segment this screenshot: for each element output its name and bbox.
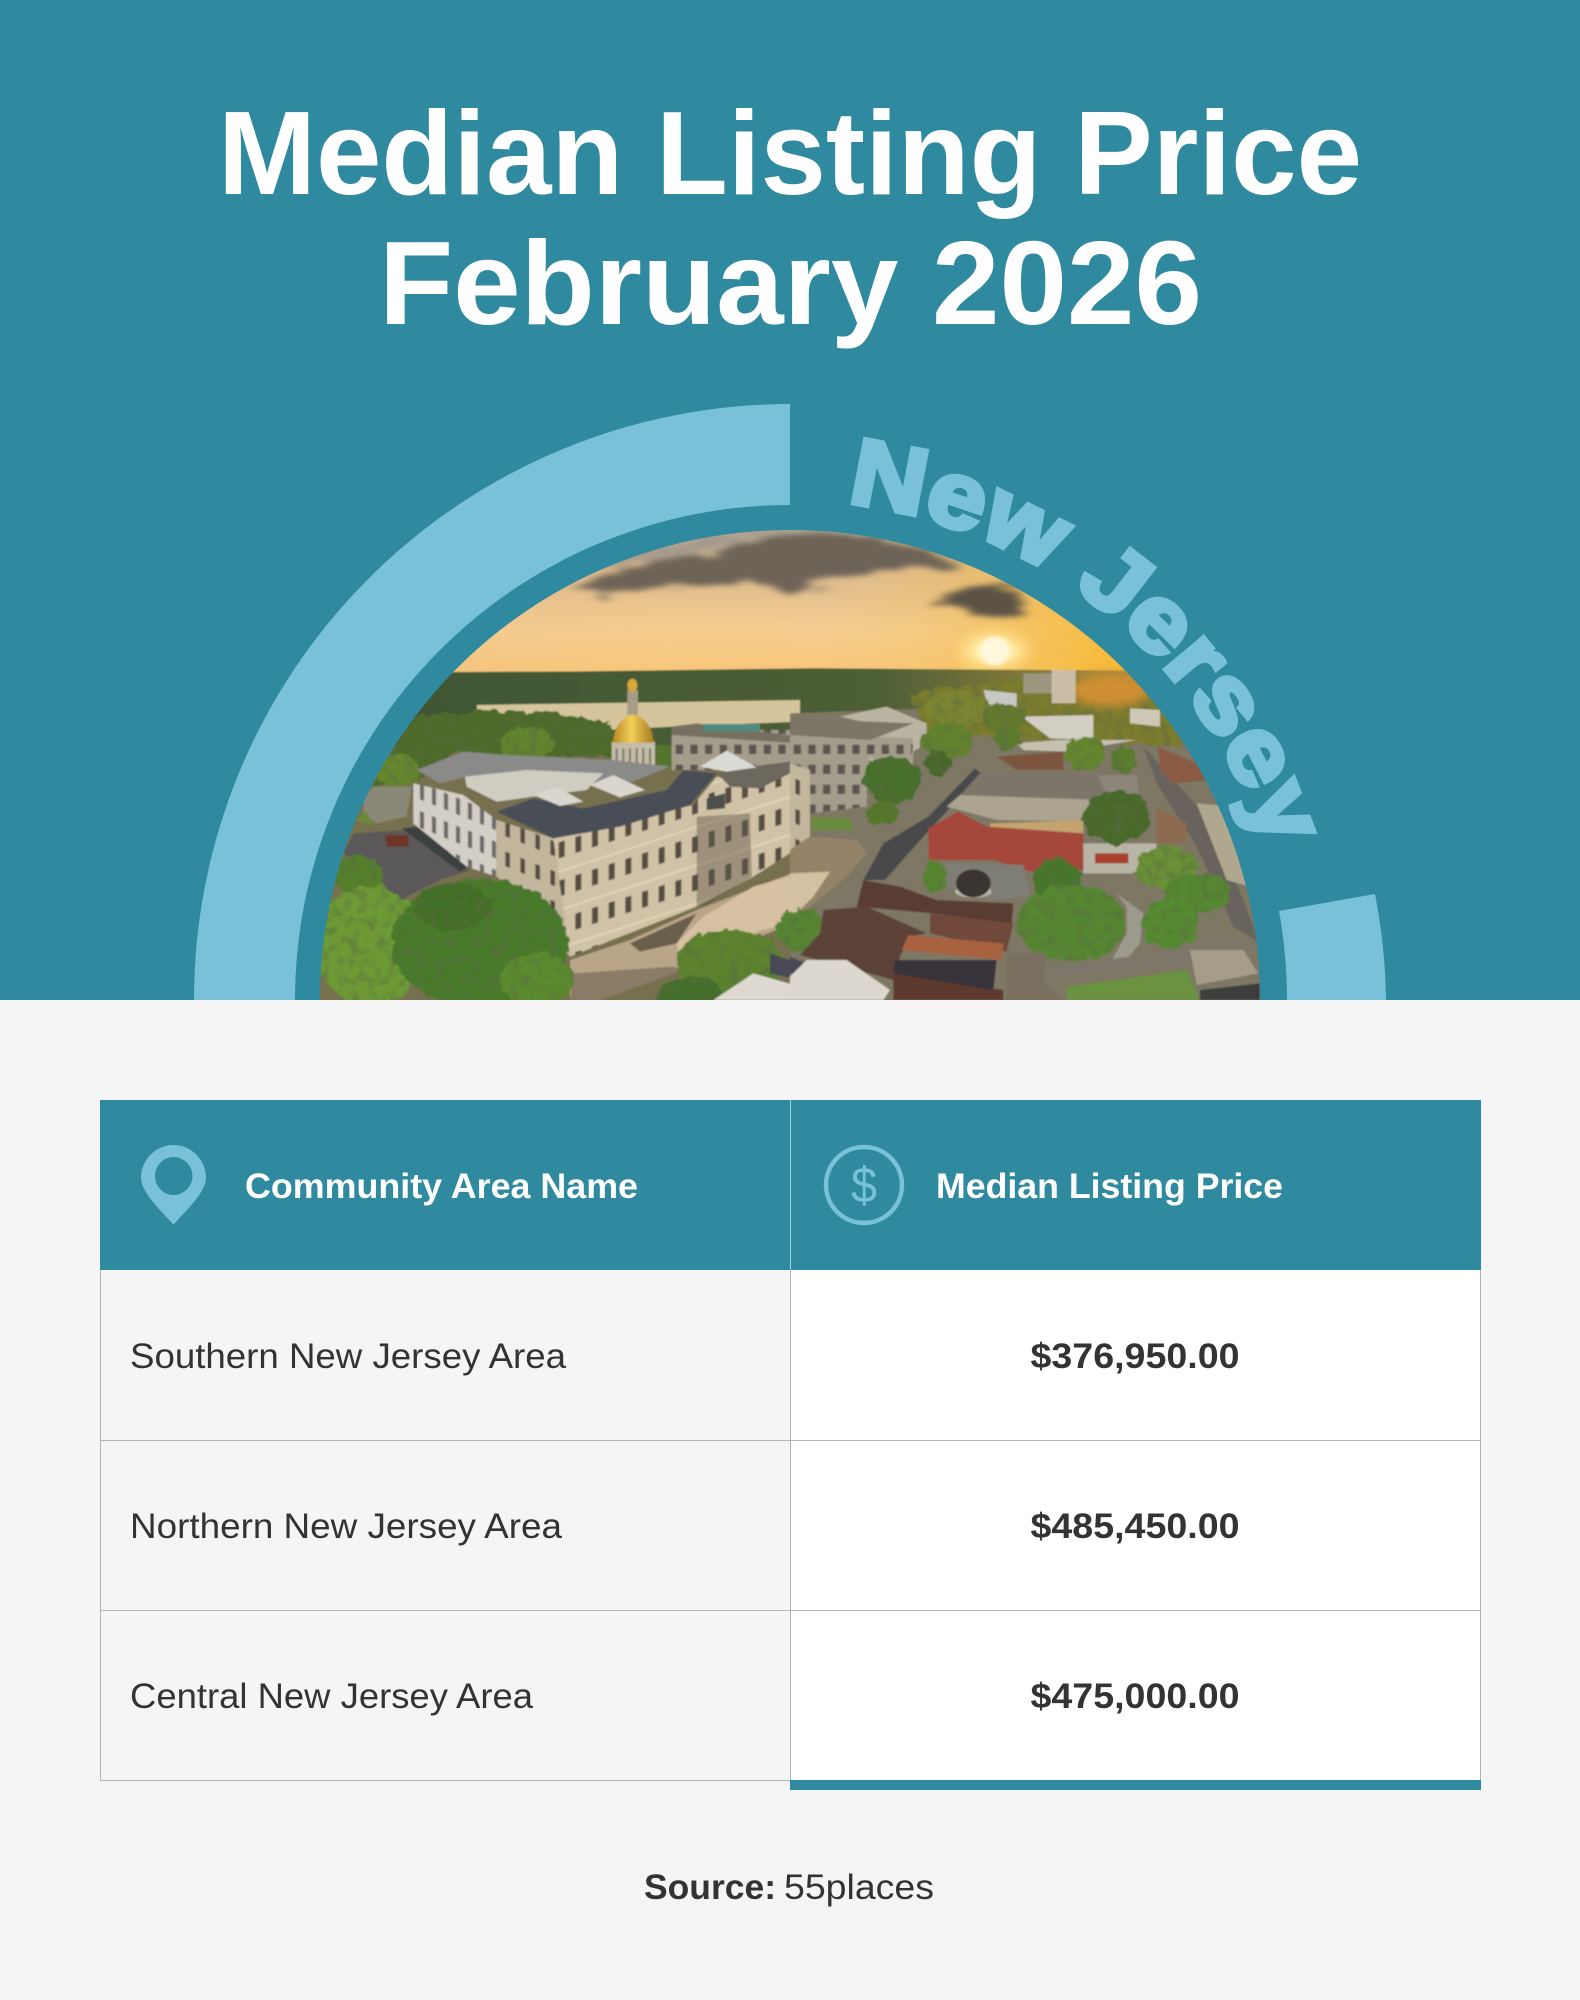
plaza [570,870,800,1000]
grounds and dirt [812,817,853,830]
panel: teal header [0,0,1580,1000]
street right and brick [1143,747,1260,943]
table value column background [790,1270,1480,1780]
red brick building [990,820,1083,833]
right half: town buildings and trees [777,670,1270,1000]
sky and far horizon [394,530,1133,746]
gold dome [612,679,655,770]
river [476,698,802,731]
capitol roofs and wings [417,752,670,787]
table accent bar [790,1780,1481,1790]
icon: dollar coin [826,1147,902,1223]
icon: location pin [141,1145,206,1224]
title: Median Listing Price [218,87,1362,220]
row: southern new jersey: Southern New Jersey Area [130,1337,567,1376]
trees [777,692,1230,962]
memorial [945,863,1030,900]
rooftops [857,880,1013,925]
row: central new jersey: Central New Jersey Area [130,1677,534,1716]
curved label: New Jersey: New Jersey [850,436,1318,834]
row: southern new jersey [130,1337,1240,1376]
town buildings [1022,715,1093,740]
right arc ring segment [1279,894,1386,1000]
road [863,768,982,880]
riverside trees [370,710,613,787]
icon: dollar coin: $ [851,1157,877,1213]
base ground [790,700,1270,1000]
source note: 55places [784,1868,934,1907]
row: southern new jersey: $376,950.00 [1030,1337,1240,1376]
table header row [100,1100,1481,1270]
bottom roofs [769,953,790,978]
row: northern new jersey: Northern New Jersey Area [130,1507,563,1546]
annex [1083,843,1157,873]
left half: capitol, dome, trees [317,679,800,1017]
row: northern new jersey [130,1507,1240,1546]
table grid lines [100,1270,1480,1780]
title: February 2026 [379,217,1202,350]
header label: community area name: Community Area Name [245,1167,638,1206]
row: northern new jersey: $485,450.00 [1030,1507,1240,1546]
table [100,1100,1481,1790]
header label: median listing price: Median Listing Price [936,1167,1283,1206]
row: central new jersey: $475,000.00 [1030,1677,1240,1716]
back building [672,730,800,770]
walkway, wall, lawn [1112,894,1144,960]
foreground trees [317,855,783,1017]
left arc ring [194,404,790,1000]
title [218,87,1362,350]
outbuilding and parking [363,787,412,823]
source note: Source: [644,1868,776,1907]
source note [644,1868,934,1907]
capitol east end [790,763,810,850]
photo: aerial view of Trenton capitol at sunset [320,530,1260,1000]
distant warm trees and tower [910,677,1183,747]
row: central new jersey [130,1677,1240,1716]
back building [840,706,928,766]
